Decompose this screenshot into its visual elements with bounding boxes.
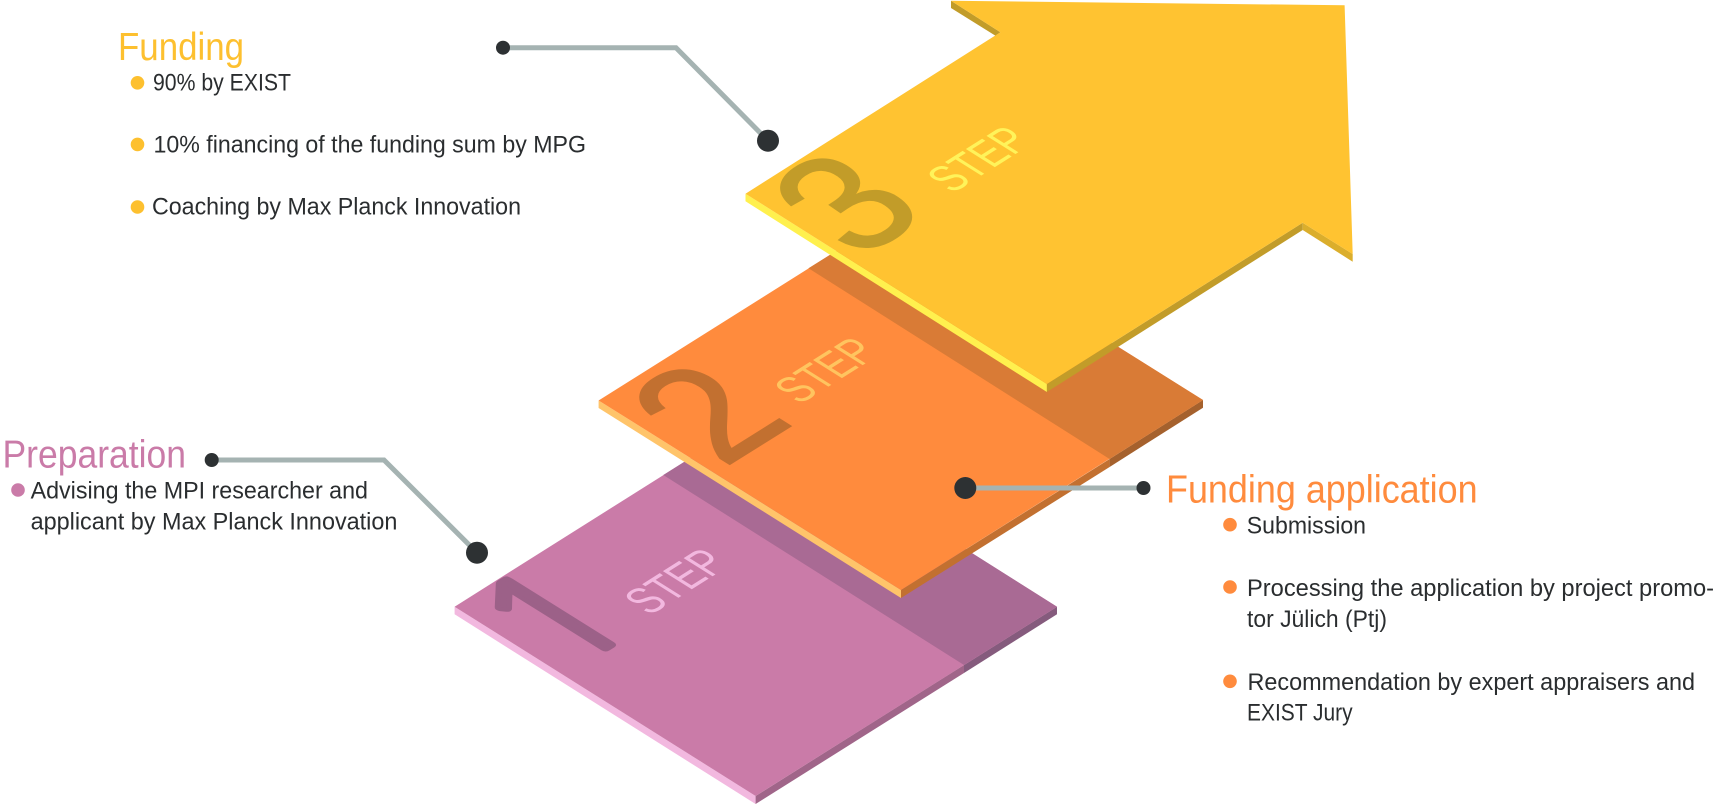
text block: funding: 90% by EXIST [153,70,291,97]
panel: step 2 plate [585,210,1203,598]
arrow: funding leader line [496,41,779,152]
arrow: funding application leader line [954,477,1150,499]
step 3 numeral: 3 [729,124,961,282]
panel: step 1 plate [444,417,1057,804]
step 3 label: STEP [915,119,1043,200]
arrow: preparation leader line [205,453,488,564]
text block: preparation: applicant by Max Planck Innovation [31,508,397,535]
step 1 numeral: 1 [444,549,666,687]
text block: funding: Coaching by Max Planck Innovation [152,194,521,221]
text block: preparation [2,434,397,535]
heading: preparation: Preparation [2,434,186,477]
text block: funding application: Submission [1247,512,1366,539]
heading: funding application: Funding application [1166,469,1478,512]
text block: funding [118,26,586,221]
text block: funding application: Recommendation by expert appraisers and [1248,669,1695,696]
heading: funding: Funding [118,26,244,69]
text block: funding application: EXIST Jury [1247,700,1353,727]
panel: step 3 arrow [729,1,1353,392]
text block: funding application: tor Jülich (Ptj) [1247,606,1387,633]
step 1 label: STEP [612,541,740,622]
text block: preparation: Advising the MPI researcher and [31,477,368,504]
text block: funding application [1166,469,1714,727]
step 2 numeral: 2 [585,336,830,489]
text block: funding application: Processing the application by project promo- [1247,575,1714,602]
text block: funding: 10% financing of the funding sum by MPG [154,132,586,159]
step 2 label: STEP [762,330,890,411]
